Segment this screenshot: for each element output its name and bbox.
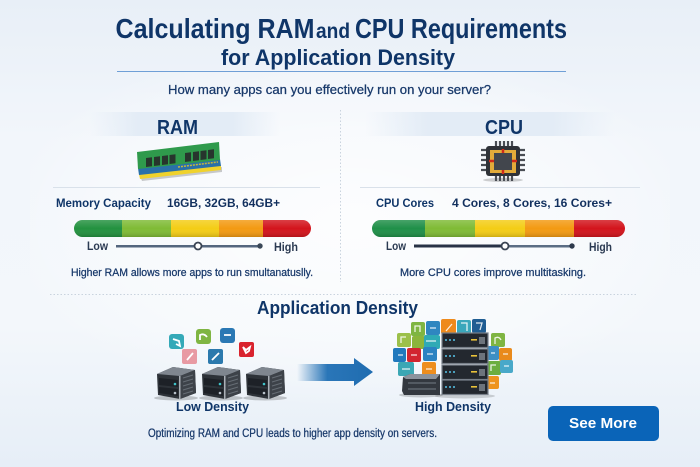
heading: RAM: RAM [157,116,198,139]
note: CPU: More CPU cores improve multitasking. [400,267,586,279]
spec: memory capacity: Memory Capacity [56,196,151,210]
divider [360,187,640,188]
panel: high density [393,319,513,414]
title rule [117,71,566,72]
panel: CPU [360,112,640,279]
icon: server rack [435,333,495,398]
footer text: Optimizing RAM and CPU leads to higher app density on servers. [148,428,437,440]
title: Calculating RAM [116,13,314,44]
spec: CPU cores: CPU Cores [376,196,434,210]
subtitle: How many apps can you effectively run on your server? [168,82,491,97]
heading: RAM [90,112,280,139]
slider: CPU: Low [386,241,406,253]
heading: CPU: CPU [485,116,523,139]
horizontal divider [50,294,636,296]
gauge bar: RAM [74,220,311,237]
spec: memory capacity [56,196,280,210]
label: high density: High Density [415,400,491,414]
icon: small server [399,374,443,398]
title [116,13,567,70]
gauge bar: CPU [372,220,625,237]
slider: CPU [386,240,612,254]
button: see more: See More [569,415,637,432]
label: low density: Low Density [176,400,249,414]
icons: app cluster [393,319,513,389]
icon: RAM stick [137,142,222,181]
title: for Application Density [221,45,456,70]
vertical divider [340,110,342,282]
spec: CPU cores [376,196,612,210]
slider: CPU: High [589,240,612,254]
heading: CPU [365,112,615,139]
note: RAM: Higher RAM allows more apps to run smultanatuslly. [71,267,313,279]
button: see more [548,406,659,441]
panel: RAM [53,112,320,279]
slider: RAM: High [274,240,298,254]
spec: CPU cores: 4 Cores, 8 Cores, 16 Cores+ [452,196,612,210]
icons: apps [169,328,254,364]
icons: servers [154,367,287,400]
panel: low density [154,328,287,414]
slider: RAM: Low [87,241,108,253]
icon: CPU chip [481,141,525,182]
title: and [316,20,350,43]
spec: memory capacity: 16GB, 32GB, 64GB+ [167,196,280,210]
slider: RAM [87,240,298,254]
divider [53,187,320,188]
title: CPU Requirements [355,13,567,44]
arrow [297,358,373,386]
heading: application density: Application Density [257,298,418,318]
